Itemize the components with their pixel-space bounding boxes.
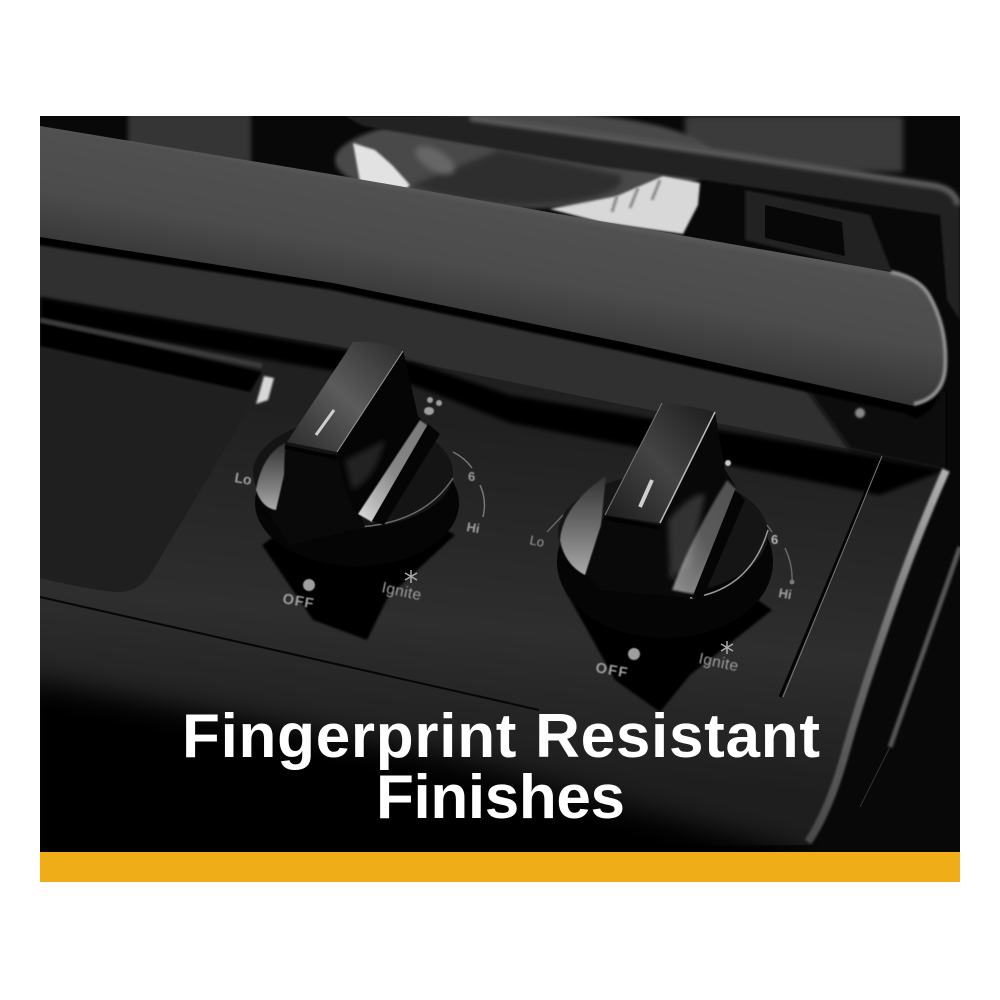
panel lower edge — [40, 597, 539, 710]
knob left dial — [253, 418, 453, 528]
knob left dial labels: Ignite — [380, 579, 423, 604]
knob left base — [255, 480, 459, 538]
stove surface — [40, 297, 940, 845]
title — [182, 702, 820, 832]
knob left grip shadow — [277, 450, 365, 528]
knob right fin highlight — [560, 476, 606, 575]
infographic — [40, 116, 960, 882]
knob left side sheen — [345, 440, 385, 490]
knob right dial labels: Ignite — [697, 650, 740, 675]
knob left dial labels: 6 — [468, 469, 475, 484]
knob left — [233, 342, 484, 640]
knob left dial labels — [233, 397, 481, 612]
title: Fingerprint Resistant — [182, 702, 820, 771]
knob left reflection — [262, 530, 455, 640]
knob right dial — [558, 474, 768, 594]
left inset panel — [40, 320, 274, 592]
strip under grate — [40, 240, 945, 495]
knob right highlight stripe — [672, 480, 737, 595]
title: Finishes — [376, 763, 625, 832]
knob right grip shadow — [586, 515, 684, 594]
knob left dial labels: OFF — [281, 591, 316, 612]
knob right reflection — [565, 592, 772, 712]
knob right rim — [690, 530, 768, 598]
knob right dial labels: Lo — [528, 532, 546, 550]
knob left ignite star — [405, 570, 417, 583]
knob right dial labels: 6 — [771, 532, 778, 547]
knob left rim — [360, 478, 453, 527]
knob right dial labels — [528, 460, 793, 682]
knob right ignite star — [721, 641, 733, 654]
background burner — [128, 112, 903, 272]
knob right dial labels: OFF — [594, 660, 630, 682]
right trim — [780, 456, 960, 842]
lower dark front — [40, 673, 797, 852]
knob right side sheen — [668, 494, 705, 580]
product photo: cooktop knobs — [20, 112, 960, 880]
knob left dial labels: Lo — [233, 469, 253, 488]
gold footer bar — [40, 852, 960, 882]
knob left indicator — [316, 410, 334, 435]
knob right — [528, 403, 794, 712]
knob left highlight stripe — [358, 420, 428, 522]
knob right indicator — [640, 480, 652, 507]
knob left fin highlight — [256, 443, 285, 510]
knob left top face — [287, 342, 403, 452]
knob right base — [557, 538, 773, 600]
knob left dial labels: Hi — [465, 519, 481, 536]
upper grate bar — [345, 116, 960, 320]
knob right dial labels: Hi — [777, 585, 793, 602]
main grate bar — [38, 126, 945, 419]
knob right top face — [605, 403, 715, 523]
